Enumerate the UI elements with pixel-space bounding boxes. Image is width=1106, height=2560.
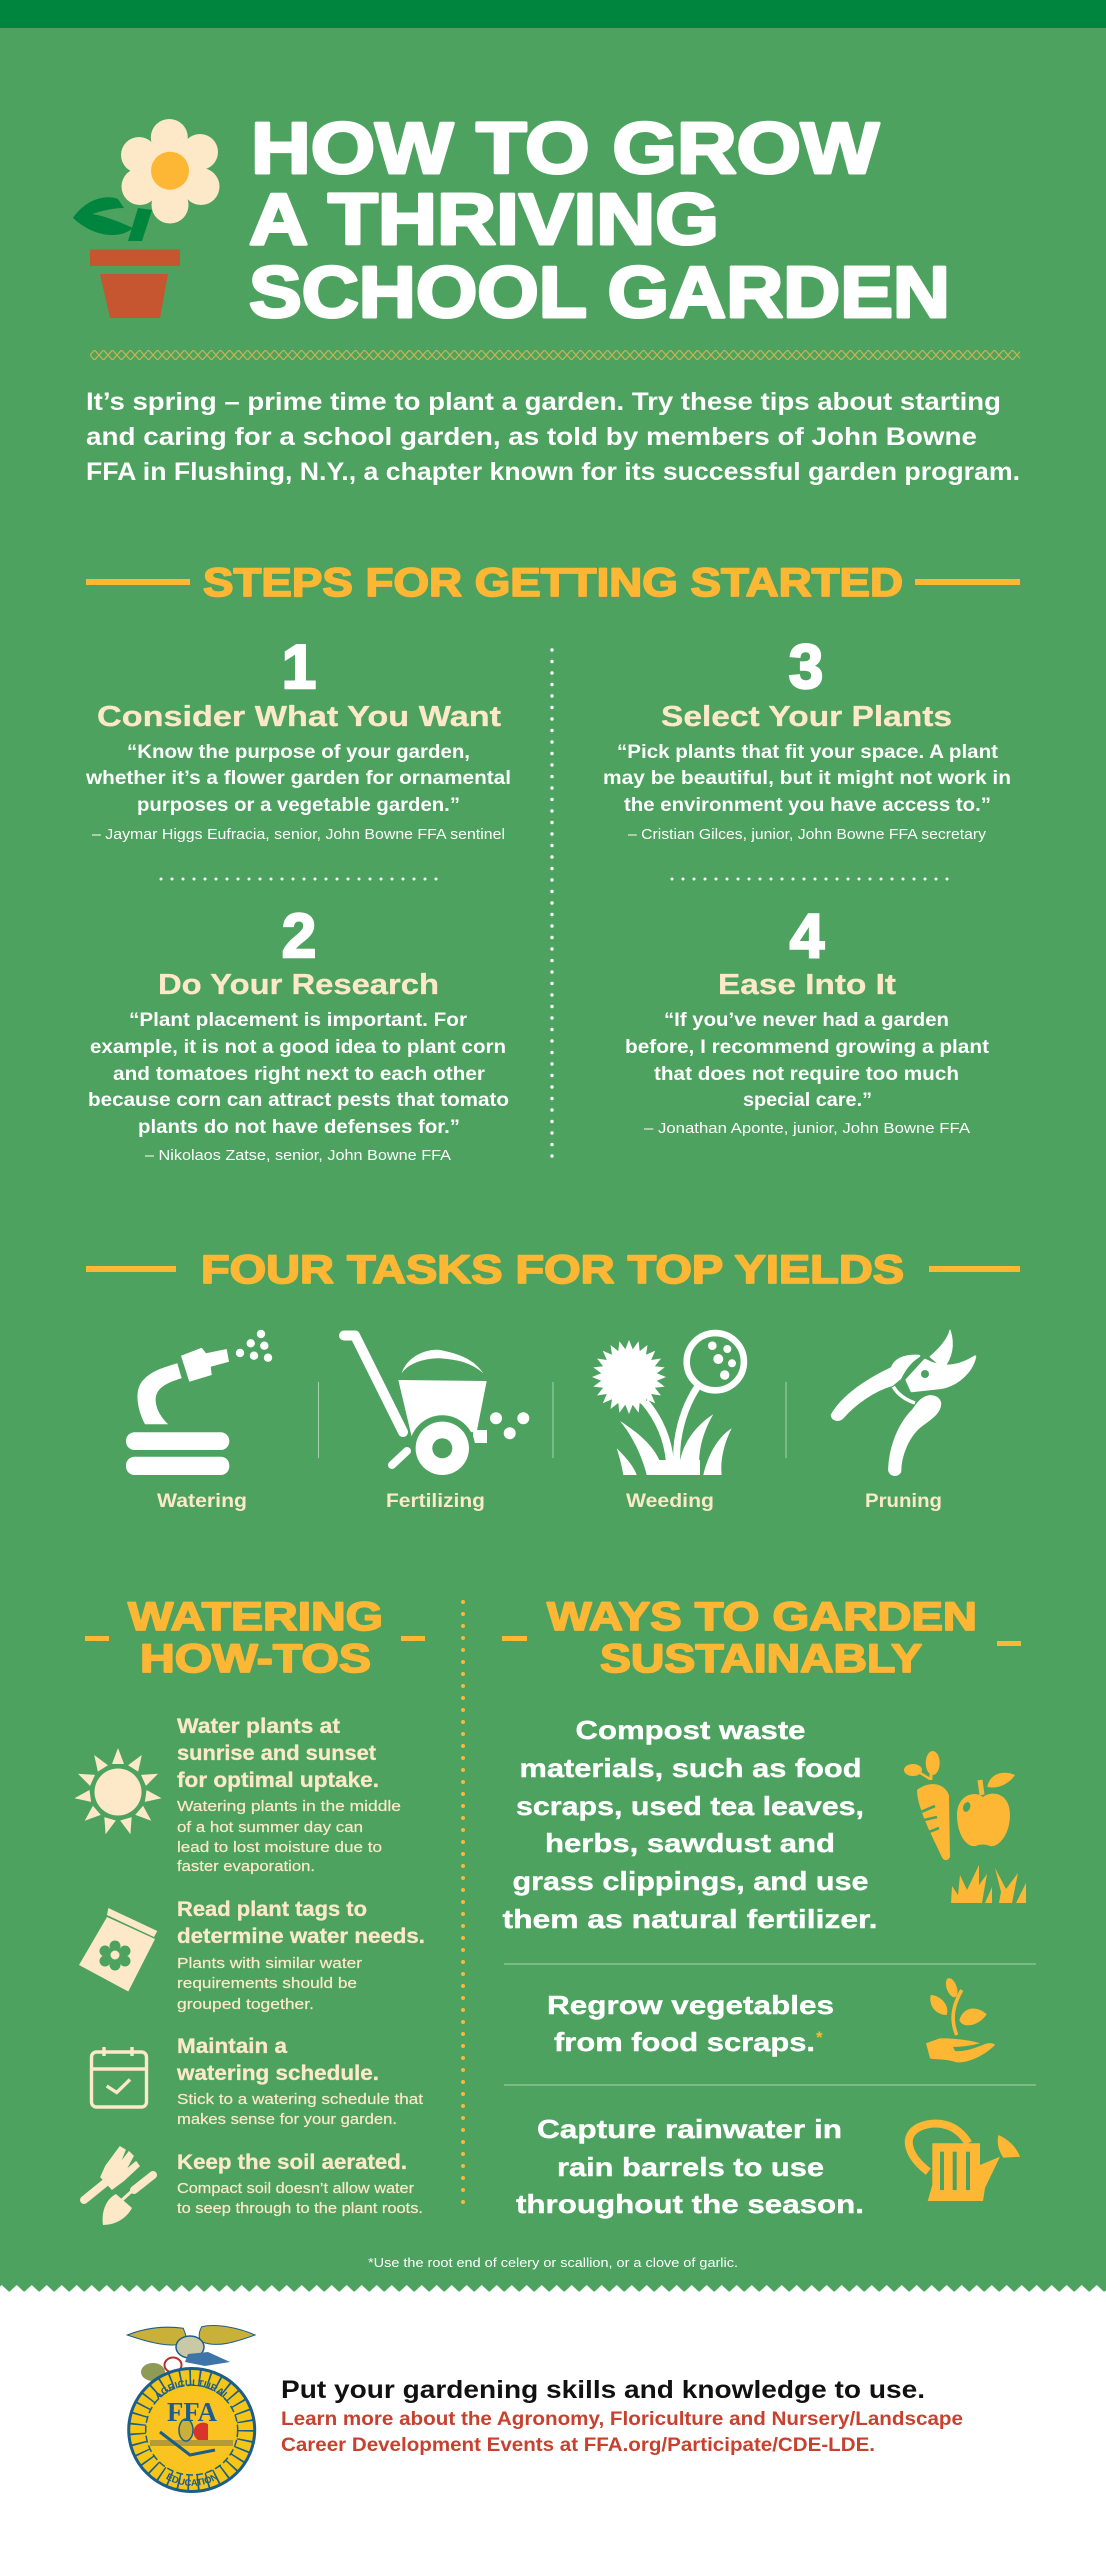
icon: calendar bbox=[92, 2047, 146, 2107]
step 4 bbox=[625, 902, 990, 1137]
panel: steps for getting started bbox=[85, 561, 1020, 1164]
heading: watering how-tos bbox=[85, 1595, 425, 1681]
footer text: Put your gardening skills and knowledge to use. bbox=[281, 2376, 925, 2404]
compost text: Compost waste bbox=[576, 1715, 806, 1745]
panel: four tasks bbox=[86, 1248, 1020, 1512]
seal: AGRICULTURAL bbox=[156, 2379, 228, 2400]
step 3: Select Your Plants bbox=[661, 701, 952, 733]
step 2: – Nikolaos Zatse, senior, John Bowne FFA bbox=[145, 1147, 451, 1164]
tip 1 text: sunrise and sunset bbox=[177, 1742, 376, 1765]
tip 1 text: faster evaporation. bbox=[177, 1858, 315, 1875]
heading: steps: STEPS FOR GETTING STARTED bbox=[203, 561, 903, 605]
heading: ways to garden: SUSTAINABLY bbox=[600, 1637, 922, 1681]
tip 2 text: Plants with similar water bbox=[177, 1955, 362, 1972]
heading: ways to garden bbox=[502, 1595, 1021, 1681]
tip 1 text bbox=[177, 1715, 401, 1875]
compost text: scraps, used tea leaves, bbox=[516, 1791, 864, 1821]
step 1 bbox=[85, 633, 511, 843]
task labels: Watering bbox=[157, 1491, 247, 1512]
heading: four tasks bbox=[86, 1248, 1020, 1292]
step 1: 1 bbox=[282, 633, 316, 702]
step 1: whether it’s a flower garden for ornamental bbox=[85, 768, 511, 789]
task labels: Fertilizing bbox=[386, 1491, 485, 1512]
tip 1 text: Watering plants in the middle bbox=[177, 1798, 401, 1815]
tip 1 text: of a hot summer day can bbox=[177, 1819, 363, 1836]
intro text: FFA in Flushing, N.Y., a chapter known for its successful garden program. bbox=[86, 458, 1020, 486]
tip 2 text: Read plant tags to bbox=[177, 1898, 367, 1921]
heading: watering how-tos: HOW-TOS bbox=[140, 1637, 371, 1681]
step 4: before, I recommend growing a plant bbox=[625, 1037, 990, 1058]
compost text: them as natural fertilizer. bbox=[502, 1904, 878, 1934]
FFA emblem bbox=[126, 2325, 256, 2493]
regrow text bbox=[547, 1990, 834, 2057]
step 4: 4 bbox=[790, 902, 825, 971]
tip 3 text: Maintain a bbox=[177, 2035, 287, 2058]
step 1: “Know the purpose of your garden, bbox=[127, 742, 470, 763]
step 2: “Plant placement is important. For bbox=[129, 1010, 468, 1031]
step 4: “If you’ve never had a garden bbox=[664, 1010, 949, 1031]
tip 3 text: makes sense for your garden. bbox=[177, 2111, 397, 2128]
task labels bbox=[157, 1491, 942, 1512]
step 3 bbox=[603, 633, 1011, 843]
tip 1 text: lead to lost moisture due to bbox=[177, 1839, 382, 1856]
step 2: because corn can attract pests that tomato bbox=[88, 1090, 509, 1111]
header bbox=[73, 109, 950, 333]
intro text: It’s spring – prime time to plant a garden. Try these tips about starting bbox=[86, 388, 1001, 416]
tip 2 text bbox=[177, 1898, 425, 2013]
step 3: 3 bbox=[789, 633, 823, 702]
footnote: *Use the root end of celery or scallion, or a clove of garlic. bbox=[368, 2255, 738, 2270]
title: SCHOOL GARDEN bbox=[249, 253, 950, 333]
icon: watering can bbox=[909, 2124, 1020, 2201]
icon: seed packet bbox=[79, 1908, 157, 1992]
seal: EDUCATION bbox=[166, 2473, 218, 2486]
tip 3 text: watering schedule. bbox=[176, 2062, 379, 2085]
step 1: – Jaymar Higgs Eufracia, senior, John Bowne FFA sentinel bbox=[92, 826, 505, 843]
step 4: special care.” bbox=[743, 1090, 872, 1111]
footer text: Career Development Events at FFA.org/Participate/CDE-LDE. bbox=[281, 2434, 875, 2456]
regrow text: from food scraps. bbox=[554, 2027, 815, 2057]
title bbox=[249, 109, 950, 333]
step 2 bbox=[88, 902, 509, 1164]
icon: wheelbarrow bbox=[344, 1336, 529, 1481]
step 2: plants do not have defenses for.” bbox=[138, 1117, 460, 1138]
step 2: and tomatoes right next to each other bbox=[113, 1064, 486, 1085]
icon: weeds bbox=[592, 1333, 744, 1475]
icon: pruning shears bbox=[832, 1330, 975, 1475]
task labels: Weeding bbox=[626, 1491, 714, 1512]
tip 4 text bbox=[177, 2151, 423, 2217]
title: HOW TO GROW bbox=[251, 109, 879, 189]
step 3: “Pick plants that fit your space. A plant bbox=[617, 742, 999, 763]
step 2: Do Your Research bbox=[158, 969, 439, 1001]
icon: sprout in hand bbox=[926, 1977, 995, 2062]
compost text: materials, such as food bbox=[520, 1753, 862, 1783]
regrow text: * bbox=[816, 2028, 823, 2047]
step 3: the environment you have access to.” bbox=[624, 795, 991, 816]
seal: FFA bbox=[167, 2397, 217, 2427]
tip 2 text: requirements should be bbox=[177, 1975, 357, 1992]
capture text: Capture rainwater in bbox=[537, 2114, 842, 2144]
heading: steps bbox=[86, 561, 1020, 605]
icon: garden tools bbox=[84, 2147, 153, 2225]
eagle bbox=[127, 2326, 255, 2381]
step 2: example, it is not a good idea to plant corn bbox=[90, 1037, 506, 1058]
heading: watering how-tos: WATERING bbox=[128, 1595, 383, 1639]
step 3: may be beautiful, but it might not work in bbox=[603, 768, 1011, 789]
step 4: Ease Into It bbox=[718, 969, 896, 1001]
tip 1 text: for optimal uptake. bbox=[177, 1769, 379, 1792]
seal bbox=[127, 2367, 256, 2493]
icon: carrot, apple, grass bbox=[904, 1751, 1026, 1903]
heading: four tasks: FOUR TASKS FOR TOP YIELDS bbox=[201, 1248, 904, 1292]
footer text bbox=[281, 2376, 963, 2456]
footer text: Learn more about the Agronomy, Floriculture and Nursery/Landscape bbox=[281, 2408, 963, 2430]
tip 4 text: Compact soil doesn’t allow water bbox=[177, 2180, 414, 2197]
top bar bbox=[0, 0, 1106, 28]
diamond divider bbox=[90, 350, 1020, 360]
step 1: purposes or a vegetable garden.” bbox=[137, 795, 460, 816]
tip 2 text: determine water needs. bbox=[177, 1925, 425, 1948]
tip 1 text: Water plants at bbox=[177, 1715, 340, 1738]
compost text: herbs, sawdust and bbox=[545, 1828, 835, 1858]
icon: sun bbox=[74, 1748, 162, 1836]
step 3: – Cristian Gilces, junior, John Bowne FFA secretary bbox=[628, 826, 987, 843]
task labels: Pruning bbox=[865, 1491, 942, 1512]
tip 4 text: to seep through to the plant roots. bbox=[177, 2200, 423, 2217]
heading: ways to garden: WAYS TO GARDEN bbox=[547, 1595, 977, 1639]
title: A THRIVING bbox=[249, 180, 719, 260]
tip 3 text: Stick to a watering schedule that bbox=[177, 2091, 424, 2108]
white footer panel bbox=[0, 2285, 1106, 2560]
step 4: – Jonathan Aponte, junior, John Bowne FFA bbox=[644, 1120, 970, 1137]
icon: flower in pot bbox=[73, 119, 220, 318]
regrow text: Regrow vegetables bbox=[547, 1990, 834, 2020]
compost text bbox=[502, 1715, 878, 1934]
intro text: and caring for a school garden, as told by members of John Bowne bbox=[86, 423, 977, 451]
step 4: that does not require too much bbox=[654, 1064, 959, 1085]
step 1: Consider What You Want bbox=[97, 701, 501, 733]
step 2: 2 bbox=[282, 902, 316, 971]
panel: watering how-tos bbox=[74, 1595, 425, 2225]
icon: watering hose bbox=[126, 1330, 272, 1475]
intro text bbox=[86, 388, 1020, 486]
panel: ways to garden sustainably bbox=[502, 1595, 1036, 2219]
tip 2 text: grouped together. bbox=[177, 1996, 314, 2013]
compost text: grass clippings, and use bbox=[512, 1866, 868, 1896]
capture text: rain barrels to use bbox=[557, 2152, 824, 2182]
capture text bbox=[516, 2114, 864, 2219]
tip 4 text: Keep the soil aerated. bbox=[177, 2151, 407, 2174]
capture text: throughout the season. bbox=[516, 2189, 864, 2219]
tip 3 text bbox=[176, 2035, 424, 2128]
